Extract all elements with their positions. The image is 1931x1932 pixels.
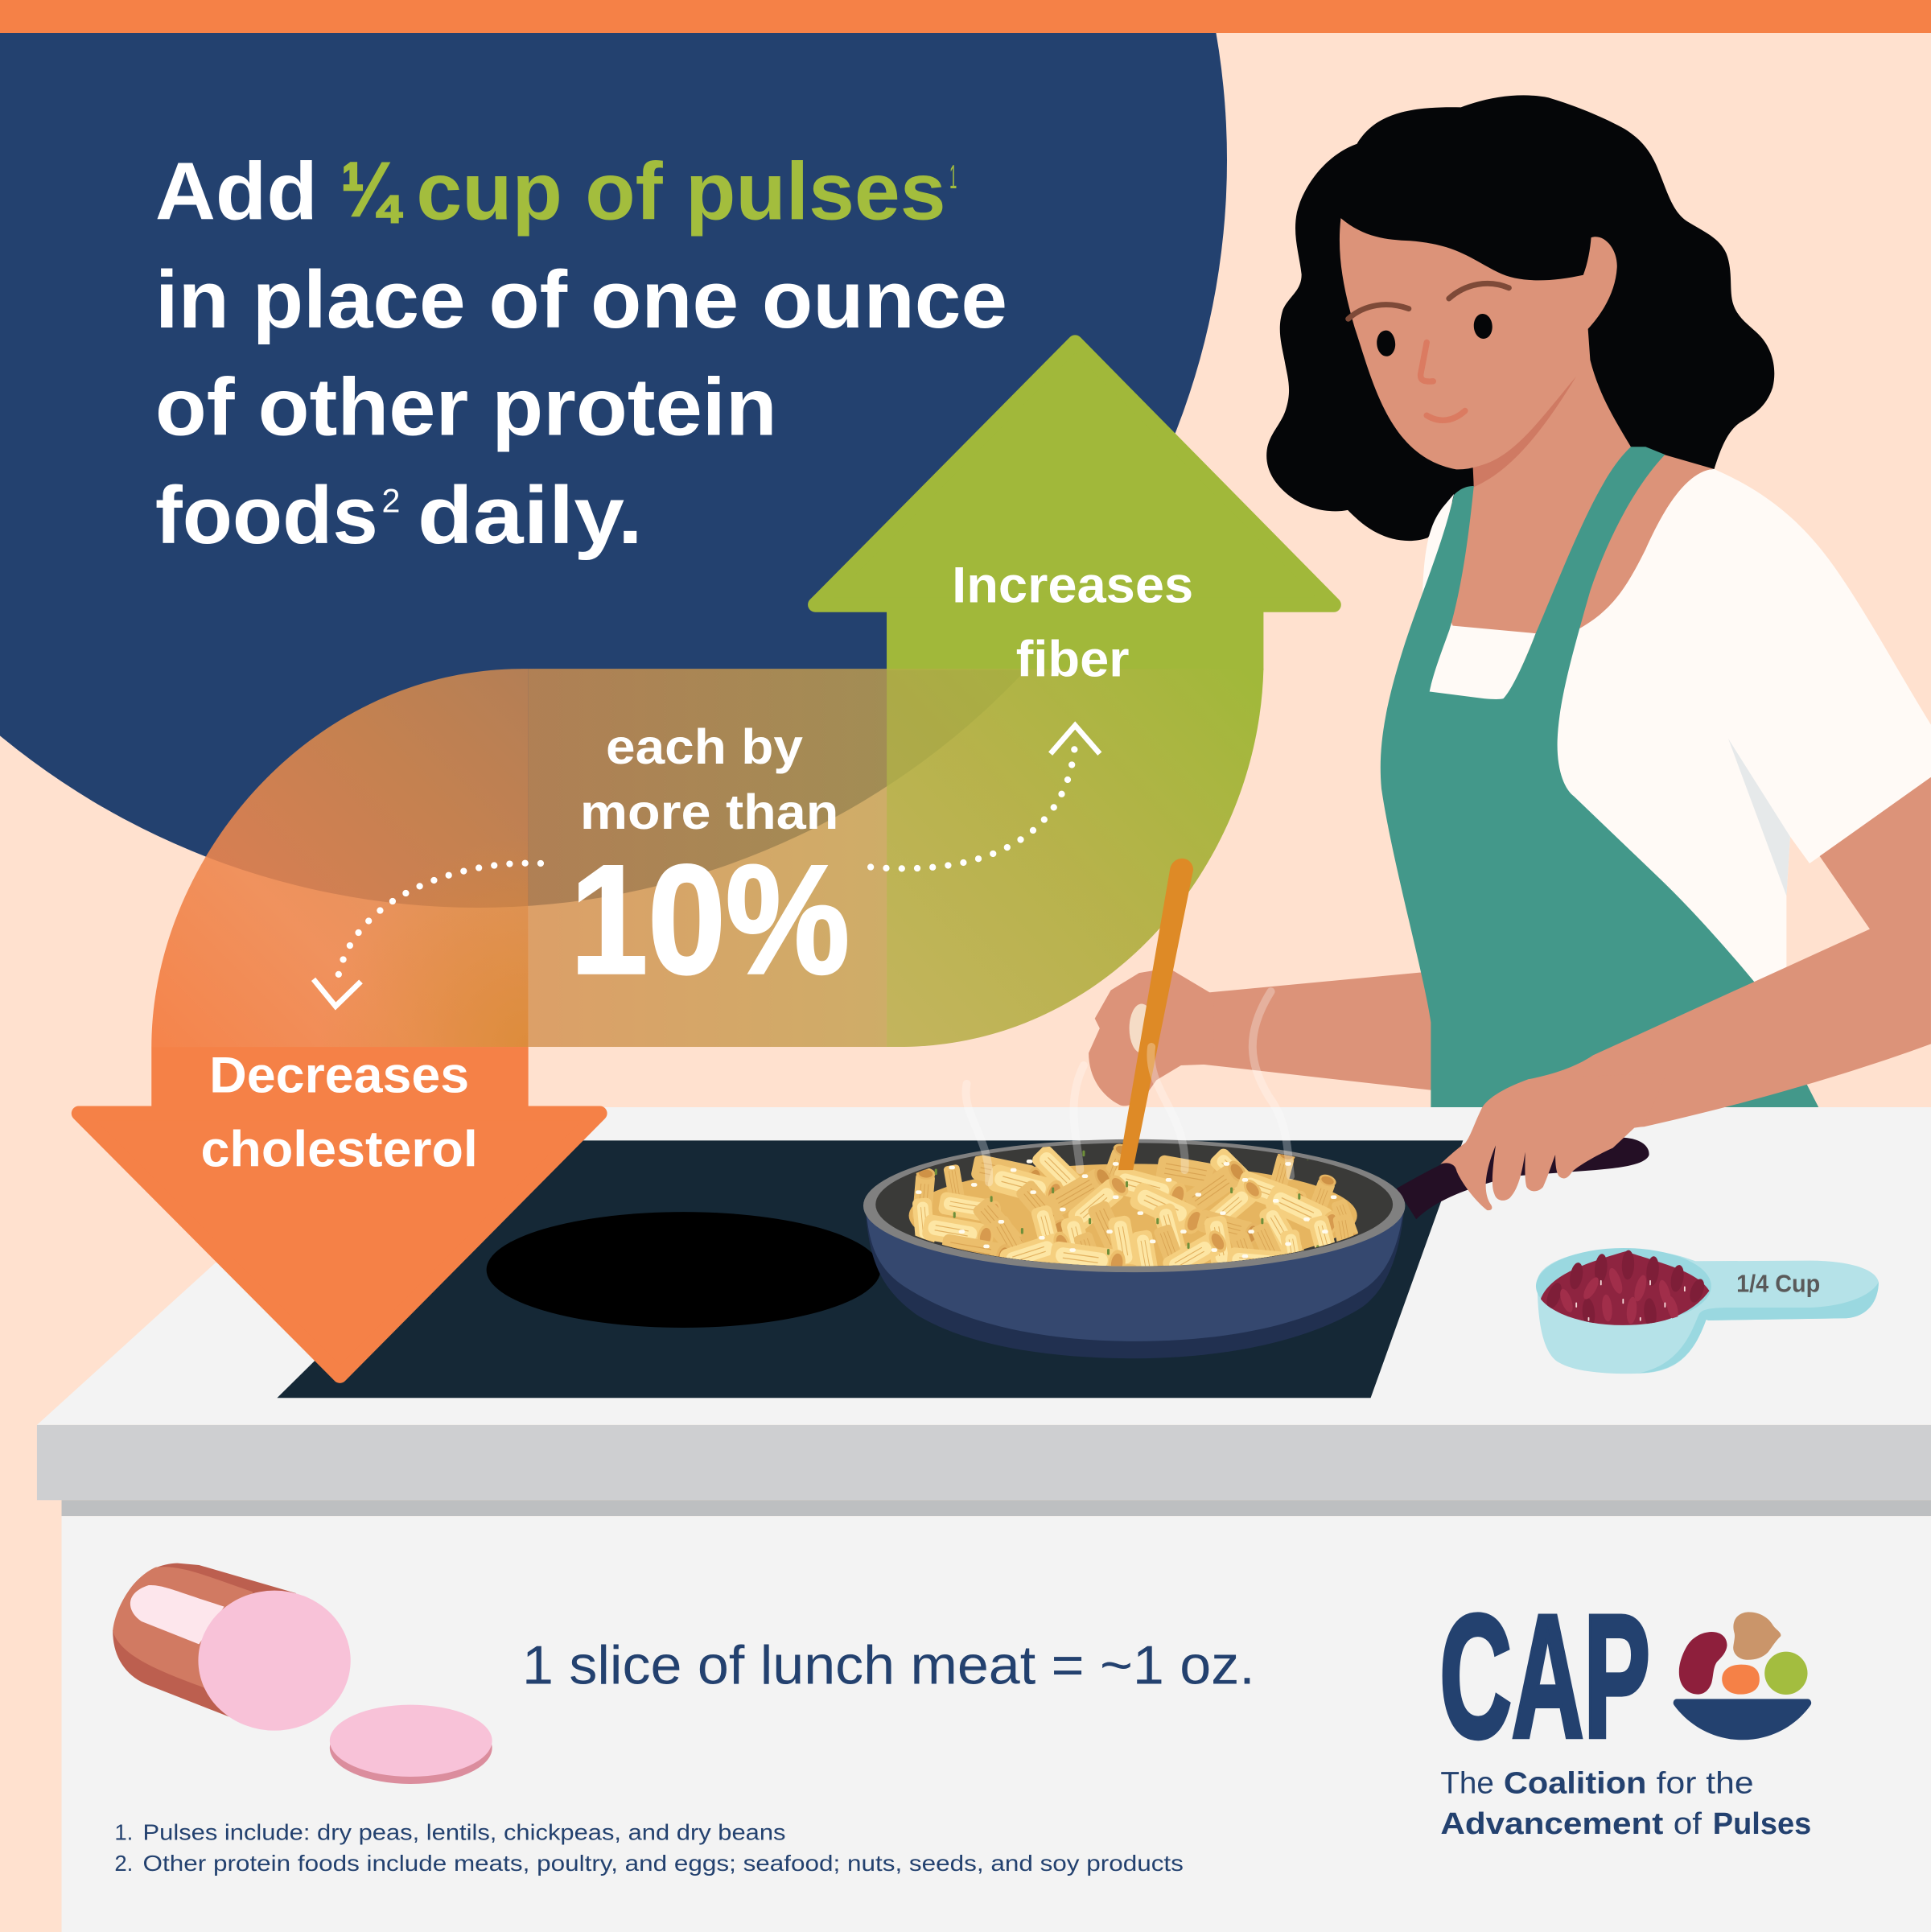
woman cooking: upper body — [1266, 95, 1931, 988]
dotted arrow to decreases — [314, 863, 541, 1007]
headline line 1: Add — [155, 146, 318, 237]
bowl of pulses icon — [1674, 1612, 1811, 1740]
increases fiber label: fiber — [1016, 631, 1130, 687]
orange band section — [151, 669, 529, 1047]
logo tagline line 1: for the — [1657, 1766, 1754, 1801]
logo tagline line 1: The — [1440, 1766, 1494, 1801]
headline line 1: cup of pulses — [416, 146, 946, 237]
headline: 1 — [949, 159, 957, 196]
footnote 2: 2. — [114, 1851, 133, 1876]
CAP logo — [1439, 1579, 1811, 1841]
headline line 1: ¼ — [341, 147, 403, 233]
neck shadow — [1473, 376, 1576, 487]
cup label: 1/4 Cup — [1736, 1271, 1820, 1298]
shirt at left shoulder — [1422, 494, 1454, 609]
white shirt — [1549, 469, 1931, 988]
green band section — [887, 669, 1263, 1047]
green pea — [1764, 1652, 1808, 1695]
burner — [487, 1212, 880, 1328]
counter front — [37, 1425, 1931, 1500]
nose and smile — [1421, 343, 1465, 420]
headline line 3: of other protein — [155, 362, 777, 452]
face — [1340, 218, 1617, 469]
dotted arrow to increases — [871, 726, 1100, 868]
headline line 4: daily. — [418, 471, 643, 561]
increases fiber label — [952, 557, 1193, 687]
shirt fold — [1728, 739, 1790, 896]
each by more than label: each by — [606, 719, 803, 774]
left hand, spoon and steam — [966, 859, 1291, 1182]
apron — [1381, 447, 1819, 1108]
wooden spoon — [1118, 859, 1193, 1170]
bottom panel — [62, 1516, 1931, 1932]
pan interior — [875, 1143, 1393, 1266]
chickpea — [1733, 1612, 1781, 1660]
left hand — [1089, 968, 1214, 1106]
top orange bar — [0, 0, 1931, 33]
lunch meat illustration — [113, 1563, 492, 1784]
right hand — [1440, 1073, 1666, 1210]
decreases cholesterol label: cholesterol — [200, 1121, 478, 1177]
orange down arrow — [79, 1114, 599, 1376]
each by more than label — [580, 719, 838, 839]
10 percent figure: 10% — [570, 832, 850, 1006]
pan handle — [1397, 1138, 1649, 1219]
kidney bean — [1679, 1632, 1727, 1695]
right arm — [1529, 777, 1931, 1127]
meat roll highlight band — [113, 1567, 253, 1690]
hair — [1266, 95, 1774, 541]
footnote 1: Pulses include: dry peas, lentils, chickpeas, and dry beans — [143, 1820, 786, 1845]
decreases cholesterol label — [200, 1048, 478, 1177]
arrows graphic — [79, 343, 1334, 1376]
cup — [1538, 1248, 1879, 1374]
decreases cholesterol label: Decreases — [209, 1048, 469, 1104]
cup shading — [1638, 1282, 1879, 1374]
each by more than label: more than — [580, 785, 838, 839]
logo tagline line 2: Pulses — [1713, 1806, 1811, 1841]
navy circle panel — [0, 0, 1227, 908]
cooktop — [277, 1140, 1463, 1398]
footnote 2: Other protein foods include meats, poultry, and eggs; seafood; nuts, seeds, and soy products — [143, 1851, 1184, 1876]
orange arrow shaft — [151, 1047, 529, 1111]
shirt at chest — [1427, 625, 1536, 702]
CAP wordmark: CAP — [1439, 1579, 1650, 1774]
pan shadow — [866, 1212, 1404, 1358]
arrow labels — [200, 557, 1193, 1177]
kitchen counter — [37, 1107, 1931, 1932]
measuring cup with beans — [1536, 1248, 1879, 1374]
logo tagline line 1 — [1440, 1766, 1754, 1801]
green up arrow head — [815, 343, 1334, 605]
green arrow shaft — [887, 603, 1263, 670]
pan body — [866, 1205, 1404, 1341]
counter shadow — [62, 1500, 1931, 1516]
bowl — [1674, 1699, 1811, 1740]
footnote 1: 1. — [114, 1820, 133, 1845]
pasta — [909, 1144, 1358, 1267]
logo tagline line 2 — [1440, 1806, 1811, 1841]
left forearm — [1200, 970, 1441, 1091]
logo tagline line 2: of — [1674, 1806, 1702, 1841]
meat slice edge — [330, 1712, 492, 1784]
headline line 2: in place of one ounce — [155, 255, 1007, 345]
red lentil — [1722, 1665, 1760, 1695]
steam — [966, 991, 1291, 1182]
beans — [1541, 1250, 1709, 1329]
meat roll shine — [130, 1585, 224, 1644]
blended band section — [529, 669, 887, 1047]
cooking pan with pasta — [863, 1138, 1649, 1358]
pan rim — [863, 1139, 1405, 1272]
headline line 1 — [155, 146, 957, 237]
footnotes — [114, 1820, 1184, 1876]
cup mouth — [1536, 1248, 1711, 1324]
counter top — [37, 1107, 1931, 1425]
orange band lower tint — [319, 838, 529, 1047]
headline line 4 — [155, 471, 643, 561]
headline — [155, 146, 1007, 561]
headline line 4: 2 — [381, 483, 400, 520]
lunch meat equivalence text: 1 slice of lunch meat = ~1 oz. — [522, 1635, 1255, 1695]
headline line 4: foods — [155, 471, 378, 561]
increases fiber label: Increases — [952, 557, 1193, 613]
meat roll side — [113, 1563, 296, 1724]
eyes — [1377, 314, 1493, 356]
logo tagline line 1: Coalition — [1504, 1766, 1646, 1801]
meat roll face — [198, 1591, 351, 1731]
meat slice — [330, 1705, 492, 1777]
neck and chest — [1443, 327, 1714, 637]
logo tagline line 2: Advancement — [1440, 1806, 1664, 1841]
hand gap — [1130, 1003, 1154, 1053]
eyebrows — [1348, 283, 1509, 319]
